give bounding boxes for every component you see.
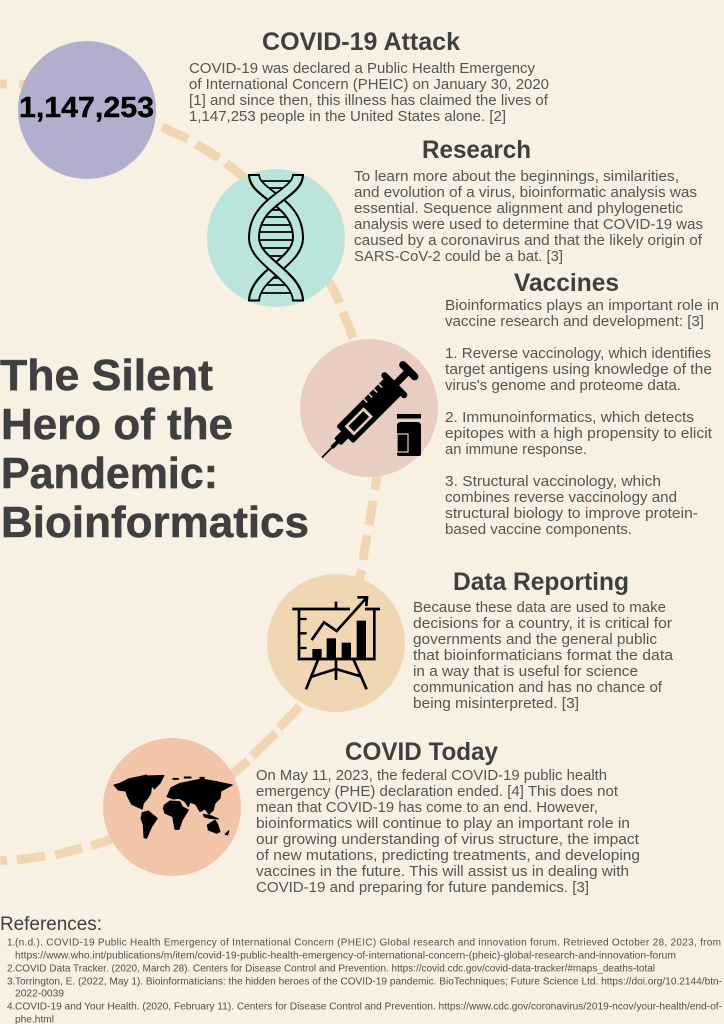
text block: Vaccines: structural biology to improve protein- [445, 506, 698, 522]
text block: COVID Today: vaccines in the future. This will assist us in dealing with [256, 864, 629, 880]
text block: COVID Today: On May 11, 2023, the federal COVID-19 public health [256, 768, 607, 784]
text block: Data Reporting: being misinterpreted. [3] [413, 696, 579, 712]
text block: Vaccines: based vaccine components. [445, 522, 632, 538]
text block: Data Reporting: decisions for a country, it is critical for [413, 616, 672, 632]
text block: Vaccines: 2. Immunoinformatics, which detects [445, 410, 694, 426]
references list: 4. [7, 1002, 15, 1012]
icon: syringe and vial in pink circle [300, 339, 438, 477]
text block: Data Reporting: Because these data are used to make [413, 600, 666, 616]
text block: Research: caused by a coronavirus and that the likely origin of [354, 233, 703, 249]
text block: COVID-19 Attack: of International Concern (PHEIC) on January 30, 2020 [189, 77, 549, 93]
references list [7, 938, 722, 1024]
text block: Vaccines: virus's genome and proteome data. [445, 378, 681, 394]
heading: Vaccines: Vaccines [514, 269, 619, 297]
dashed timeline path [0, 84, 377, 861]
text block: Data Reporting: in a way that is useful for science [413, 664, 638, 680]
text block: Research: and evolution of a virus, bioinformatic analysis was [354, 185, 697, 201]
text block: COVID-19 Attack: 1,147,253 people in the United States alone. [2] [189, 109, 506, 125]
text block: Data Reporting: communication and has no chance of [413, 680, 663, 696]
references list: COVID Data Tracker. (2020, March 28). Centers for Disease Control and Prevention. https://covid.cdc.gov/covid-data-tracker/#maps_deaths-total [15, 964, 655, 974]
text block: Research: analysis were used to determine that COVID-19 was [354, 217, 703, 233]
text block: Data Reporting: that bioinformaticians format the data [413, 648, 674, 664]
title [0, 351, 309, 547]
references list: 3. [7, 976, 15, 988]
references list: 2. [7, 964, 15, 974]
text block: COVID Today: our growing understanding of virus structure, the impact [256, 832, 639, 848]
text block: Research: SARS-CoV-2 could be a bat. [3] [354, 249, 563, 265]
text block: COVID Today [256, 768, 640, 896]
references list: 2022-0039 [15, 988, 64, 1000]
text block: Vaccines: epitopes with a high propensity to elicit [445, 426, 712, 442]
text block: Vaccines: an immune response. [445, 442, 587, 458]
references list: Torrington, E. (2022, May 1). Bioinformaticians: the hidden heroes of the COVID-19 pandemic. BioTechniques; Future Science Ltd. https://doi.org/10.2144/btn- [15, 976, 722, 988]
text block: Research [354, 169, 703, 265]
heading: References: References: [0, 914, 102, 935]
text block: Research: To learn more about the beginnings, similarities, [354, 169, 679, 185]
text block: COVID Today: mean that COVID-19 has come to an end. However, [256, 800, 598, 816]
title: Hero of the [1, 400, 233, 449]
references list: https://www.who.int/publications/m/item/covid-19-public-health-emergency-of-international-concern-(pheic)-global-research-and-innovation-forum [15, 950, 676, 962]
heading: COVID Today: COVID Today [345, 738, 498, 766]
icon: purple circle with death count: 1,147,253 [19, 92, 154, 124]
text block: Vaccines: vaccine research and development: [3] [445, 314, 704, 330]
heading: Data Reporting: Data Reporting [453, 568, 629, 596]
text block: COVID-19 Attack: [1] and since then, this illness has claimed the lives of [189, 93, 549, 109]
icon: world map in orange circle [103, 738, 241, 876]
heading: Research: Research [422, 136, 531, 164]
title: Bioinformatics [1, 498, 309, 547]
text block: COVID Today: COVID-19 and preparing for future pandemics. [3] [256, 880, 589, 896]
references list: 1. [7, 938, 15, 948]
text block: Vaccines: 3. Structural vaccinology, which [445, 474, 661, 490]
text block: Vaccines: combines reverse vaccinology and [445, 490, 677, 506]
text block: COVID Today: bioinformatics will continue to play an important role in [256, 816, 630, 832]
icon: DNA helix in teal circle [207, 169, 345, 307]
text block: COVID-19 Attack: COVID-19 was declared a Public Health Emergency [189, 61, 536, 77]
icon: purple circle with death count [18, 41, 156, 179]
title: Pandemic: [1, 449, 218, 498]
icon: presentation chart in tan circle [267, 574, 405, 712]
text block: Vaccines: 1. Reverse vaccinology, which identifies [445, 346, 711, 362]
heading: COVID-19 Attack: COVID-19 Attack [262, 28, 460, 56]
text block: COVID Today: of new mutations, predicting treatments, and developing [256, 848, 640, 864]
text block: COVID Today: emergency (PHE) declaration ended. [4] This does not [256, 784, 618, 800]
text block: Data Reporting [413, 600, 674, 712]
text block: Vaccines [445, 298, 719, 538]
text block: Research: essential. Sequence alignment and phylogenetic [354, 201, 683, 217]
text block: Data Reporting: governments and the general public [413, 632, 657, 648]
text block: COVID-19 Attack [189, 61, 549, 125]
references list: (n.d.). COVID-19 Public Health Emergency of International Concern (PHEIC) Global research and innovation forum. Retrieved October 28, 2023, from [15, 938, 721, 948]
text block: Vaccines: Bioinformatics plays an important role in [445, 298, 719, 314]
text block: Vaccines: target antigens using knowledge of the [445, 362, 712, 378]
title: The Silent [0, 351, 213, 400]
references list: COVID-19 and Your Health. (2020, February 11). Centers for Disease Control and Prevention. https://www.cdc.gov/coronavirus/2019-ncov/your-health/end-of- [15, 1002, 722, 1012]
